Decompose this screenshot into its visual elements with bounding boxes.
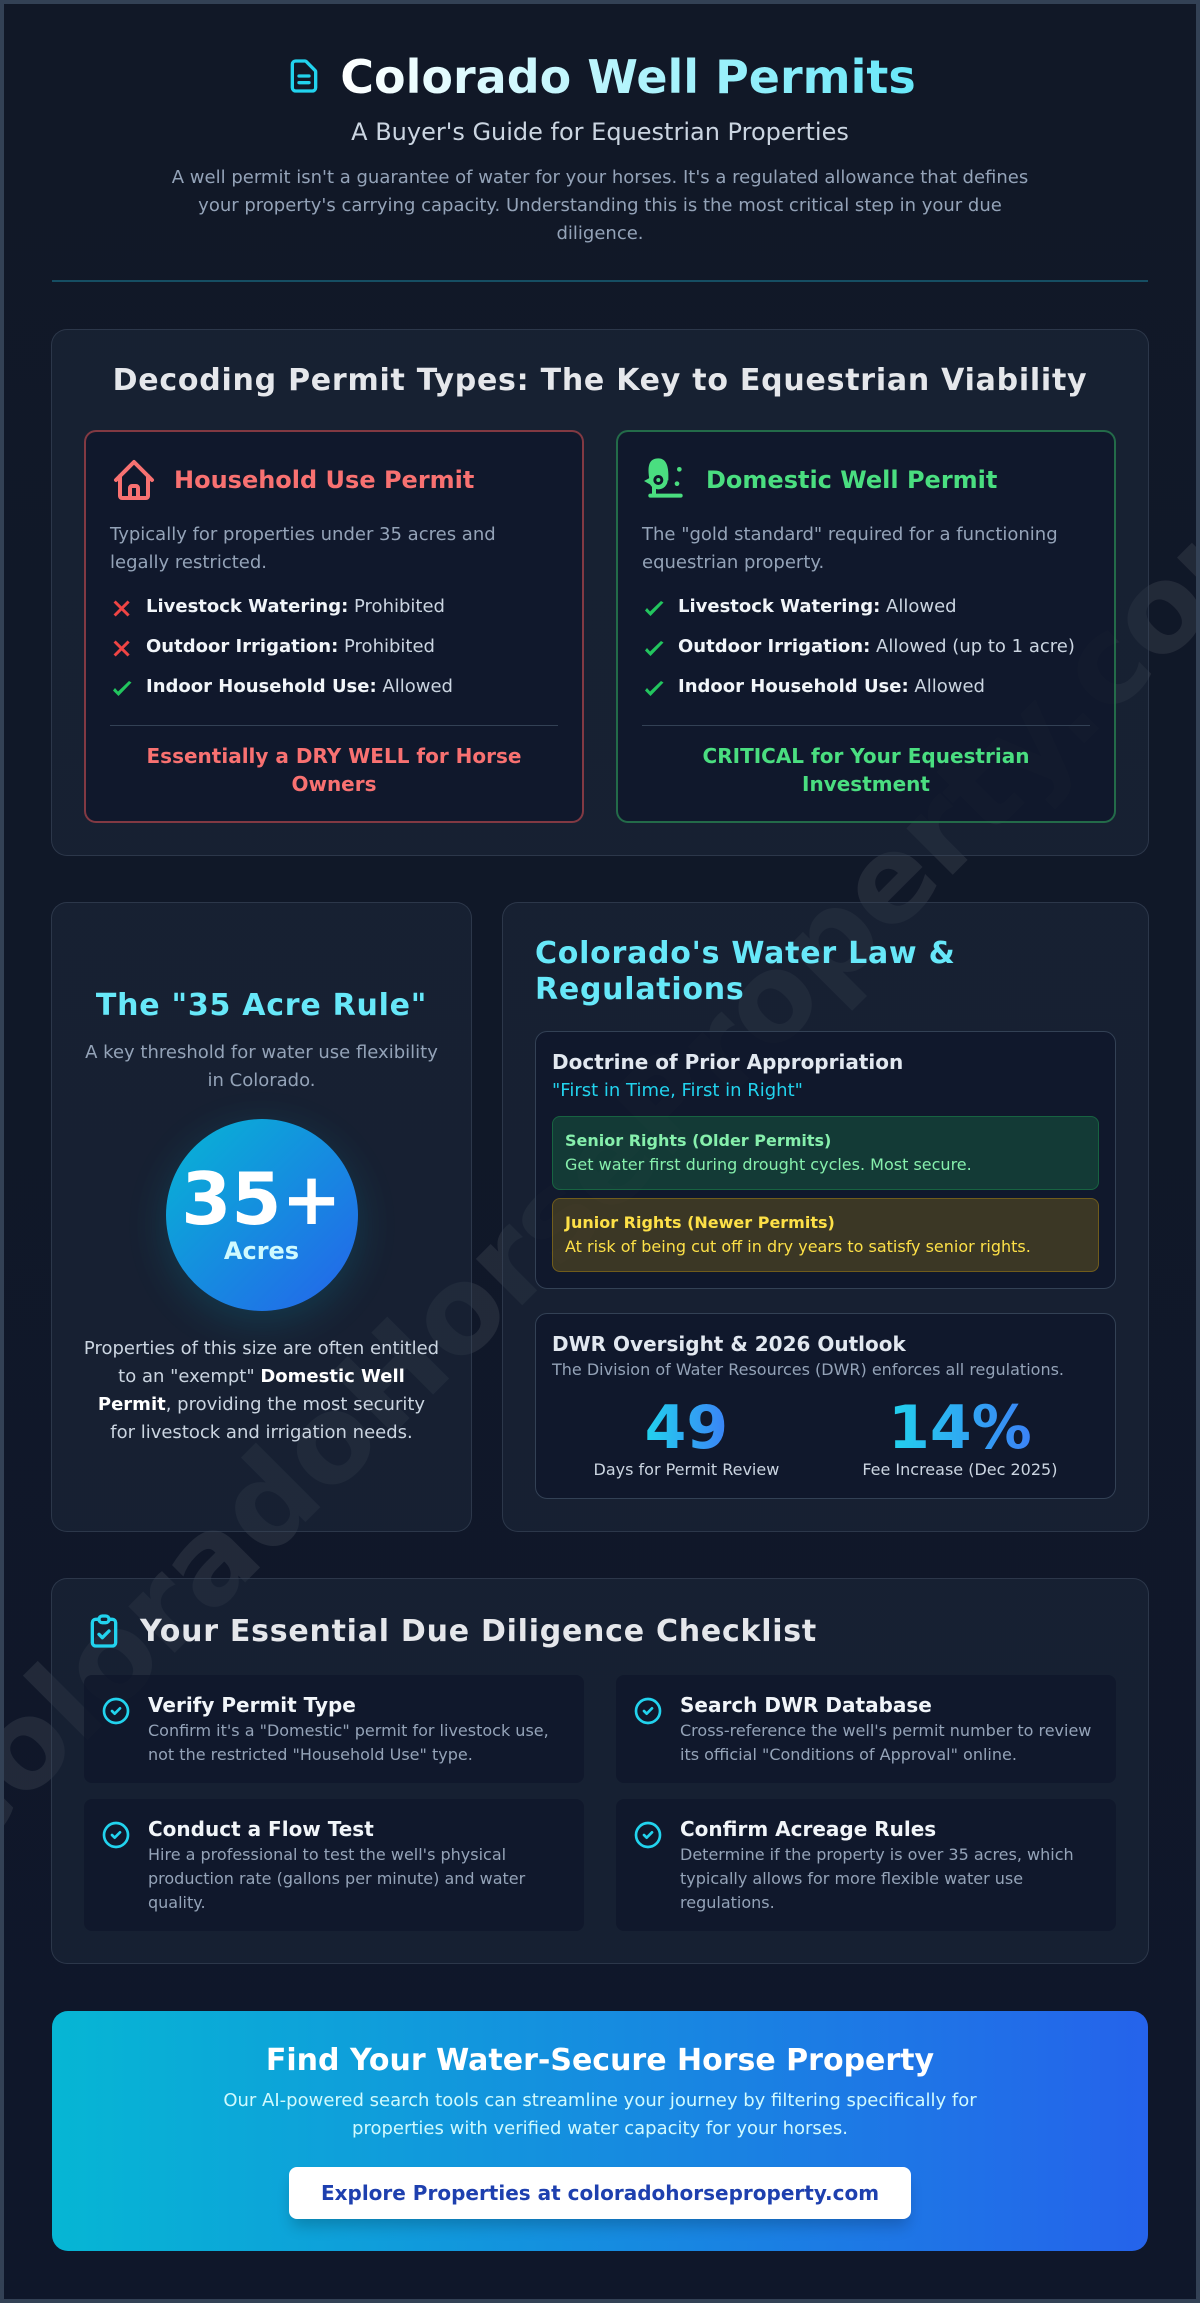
panel: 35 acre rule: [51, 902, 472, 1532]
household verdict: Essentially a DRY WELL for Horse Owners: [147, 744, 521, 796]
card: domestic well permit: [616, 430, 1116, 823]
35 acre explanation: for livestock and irrigation needs.: [110, 1422, 413, 1443]
35 acre explanation: Properties of this size are often entitled: [84, 1338, 439, 1359]
checklist heading: Your Essential Due Diligence Checklist: [140, 1614, 817, 1649]
heading: permit types: Decoding Permit Types: The Key to Equestrian Viability: [113, 363, 1087, 398]
household feature list: Outdoor Irrigation: Prohibited: [146, 636, 435, 657]
header: [52, 52, 1148, 282]
subtitle: A Buyer's Guide for Equestrian Properties: [351, 118, 849, 146]
domestic feature list: Outdoor Irrigation: Allowed (up to 1 acre): [678, 636, 1075, 657]
permit cards: [84, 430, 1116, 823]
domestic verdict: CRITICAL for Your Equestrian Investment: [703, 744, 1029, 796]
item: verify permit type: Confirm it's a "Domestic" permit for livestock use, not the restricted "Household Use" type.: [148, 1721, 549, 1764]
heading: 35 acre rule: The "35 Acre Rule": [96, 988, 427, 1023]
35 acre subtitle: in Colorado.: [208, 1070, 316, 1091]
doctrine heading: Doctrine of Prior Appropriation: [552, 1050, 903, 1074]
35 acre subtitle: A key threshold for water use flexibility: [85, 1042, 438, 1063]
item: verify permit type: Verify Permit Type: [148, 1693, 356, 1717]
junior rights callout: Junior Rights (Newer Permits): [565, 1213, 835, 1232]
35 acre explanation: to an "exempt" Domestic Well: [118, 1366, 405, 1387]
item: search DWR database: Search DWR Database: [680, 1693, 932, 1717]
CTA button: Explore Properties at coloradohorseproperty.com: [321, 2181, 879, 2205]
DWR description: The Division of Water Resources (DWR) enforces all regulations.: [552, 1360, 1064, 1379]
domestic verdict: [642, 725, 1090, 798]
household feature list: Indoor Household Use: Allowed: [146, 676, 453, 697]
intro text: A well permit isn't a guarantee of water for your horses. It's a regulated allowance that defines your property's carrying capacity. Understanding this is the most critical step in your due diligence.: [172, 167, 1028, 244]
box: prior appropriation: [535, 1031, 1116, 1289]
household card header: [114, 460, 474, 500]
item: confirm acreage rules: Confirm Acreage Rules: [680, 1817, 936, 1841]
household feature list: Livestock Watering: Prohibited: [146, 596, 445, 617]
stat circle: 35+ acres: [166, 1119, 358, 1311]
item: conduct a flow test: Conduct a Flow Test: [148, 1817, 374, 1841]
35 acre explanation: [84, 1338, 439, 1443]
item: search DWR database: Cross-reference the well's permit number to review its official "Conditions of Approval" online.: [680, 1721, 1091, 1764]
two column row: [51, 902, 1149, 1532]
panel: water law: [502, 902, 1149, 1532]
box: DWR oversight: [535, 1313, 1116, 1499]
panel: permit types: [51, 329, 1149, 856]
stat: 14 percent: [862, 1393, 1057, 1479]
senior rights callout: Senior Rights (Older Permits): [565, 1131, 831, 1150]
heading: water law: Colorado's Water Law & Regulations: [535, 936, 956, 1007]
domestic card header: Domestic Well Permit: [706, 466, 997, 494]
stat: 49 days: [594, 1393, 779, 1479]
stat circle: 35+ acres: 35+: [181, 1157, 342, 1241]
call to action: [52, 2011, 1148, 2251]
household verdict: [110, 725, 558, 798]
DWR heading: DWR Oversight & 2026 Outlook: [552, 1332, 906, 1356]
junior rights callout: At risk of being cut off in dry years to satisfy senior rights.: [565, 1237, 1031, 1256]
item: conduct a flow test: [84, 1799, 584, 1931]
stat: 14 percent: Fee Increase (Dec 2025): [862, 1460, 1057, 1479]
35 acre explanation: Permit, providing the most security: [98, 1394, 425, 1415]
panel: due diligence checklist: [51, 1578, 1149, 1964]
item: conduct a flow test: Hire a professional to test the well's physical production rate (gallons per minute) and water quality.: [148, 1845, 525, 1912]
household card header: Household Use Permit: [174, 466, 474, 494]
item: confirm acreage rules: Determine if the property is over 35 acres, which typically allows for more flexible water use regulations.: [680, 1845, 1074, 1912]
domestic feature list: Livestock Watering: Allowed: [678, 596, 957, 617]
CTA text: Our AI-powered search tools can streamline your journey by filtering specifically for properties with verified water capacity for your horses.: [223, 2090, 977, 2139]
stat: 49 days: Days for Permit Review: [594, 1460, 779, 1479]
card: household use permit: [84, 430, 584, 823]
domestic description: The "gold standard" required for a functioning equestrian property.: [642, 524, 1058, 573]
title: Colorado Well Permits: [340, 50, 916, 104]
stat circle: 35+ acres: Acres: [224, 1237, 299, 1265]
senior rights callout: [552, 1116, 1099, 1190]
stat: 49 days: 49: [645, 1393, 728, 1463]
35 acre subtitle: [85, 1042, 438, 1091]
checklist items: [84, 1675, 1116, 1930]
junior rights callout: [552, 1198, 1099, 1272]
item: verify permit type: [84, 1675, 584, 1783]
domestic feature list: [645, 596, 1075, 697]
household description: Typically for properties under 35 acres and legally restricted.: [110, 524, 496, 573]
item: confirm acreage rules: [616, 1799, 1116, 1931]
household feature list: [113, 596, 453, 697]
domestic card header: [644, 458, 997, 498]
item: search DWR database: [616, 1675, 1116, 1783]
doctrine motto: "First in Time, First in Right": [552, 1080, 803, 1101]
stat: 14 percent: 14%: [888, 1393, 1032, 1463]
CTA heading: Find Your Water-Secure Horse Property: [266, 2043, 934, 2078]
CTA button: [289, 2167, 911, 2219]
DWR stats: [594, 1393, 1057, 1479]
domestic feature list: Indoor Household Use: Allowed: [678, 676, 985, 697]
senior rights callout: Get water first during drought cycles. Most secure.: [565, 1155, 972, 1174]
